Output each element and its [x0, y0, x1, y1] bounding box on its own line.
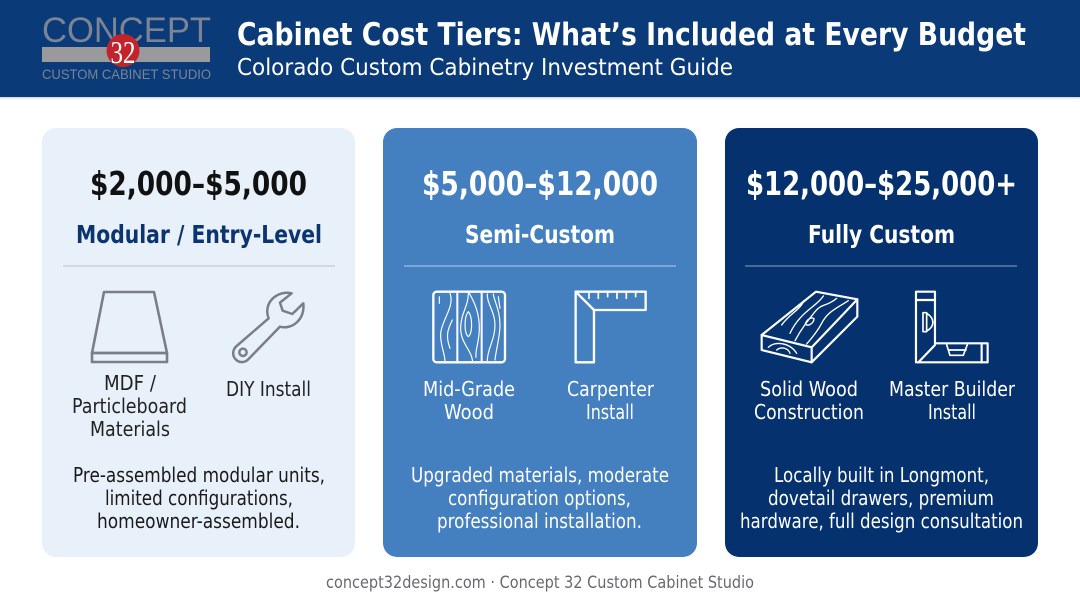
- description: semi-custom: [411, 463, 669, 533]
- label: mid-grade wood: Mid-Grade: [423, 377, 515, 401]
- label: MDF materials: [72, 371, 187, 441]
- description: entry level: Pre-assembled modular units,: [73, 463, 325, 487]
- description: fully custom: Locally built in Longmont,: [774, 463, 989, 487]
- label: mid-grade wood: Wood: [444, 400, 494, 424]
- subtitle: Colorado Custom Cabinetry Investment Guide: [237, 55, 733, 81]
- label: master builder install: [889, 377, 1016, 424]
- icon: carpenter square: [576, 292, 646, 362]
- logo: Concept 32: CUSTOM CABINET STUDIO: [42, 66, 211, 82]
- icon: master builder level: [916, 292, 988, 362]
- label: carpenter install: [567, 377, 655, 424]
- label: master builder install: Master Builder: [889, 377, 1016, 401]
- description: semi-custom: professional installation.: [437, 509, 642, 533]
- icon: solid wood plank: [762, 292, 857, 362]
- icon: wood grain panel: [433, 292, 505, 362]
- label: solid wood construction: Construction: [754, 400, 864, 424]
- description: entry level: [73, 463, 325, 533]
- label: carpenter install: Carpenter: [567, 377, 655, 401]
- tier name: fully custom: Fully Custom: [808, 220, 955, 249]
- icon: MDF board: [92, 292, 167, 362]
- panel: fully custom: [725, 128, 1038, 557]
- description: semi-custom: configuration options,: [448, 486, 631, 510]
- label: DIY install: DIY Install: [226, 377, 311, 401]
- logo: Concept 32: CONCEPT: [42, 11, 211, 50]
- description: fully custom: dovetail drawers, premium: [768, 486, 994, 510]
- label: MDF materials: MDF /: [104, 371, 156, 395]
- tier name: modular: Modular / Entry-Level: [76, 220, 322, 249]
- label: master builder install: Install: [928, 400, 976, 424]
- label: carpenter install: Install: [586, 400, 634, 424]
- label: solid wood construction: [754, 377, 864, 424]
- description: fully custom: hardware, full design consultation: [740, 509, 1023, 533]
- header band: [0, 0, 1080, 98]
- description: semi-custom: Upgraded materials, moderate: [411, 463, 669, 487]
- panel: modular entry-level: [42, 128, 355, 557]
- footer: concept32design.com · Concept 32 Custom Cabinet Studio: [326, 573, 754, 593]
- description: entry level: homeowner-assembled.: [97, 509, 300, 533]
- logo: Concept 32: [42, 11, 211, 82]
- tier name: semi-custom: Semi-Custom: [465, 220, 615, 249]
- price: semi-custom: $5,000–$12,000: [422, 164, 658, 203]
- price: entry level: $2,000–$5,000: [90, 164, 307, 203]
- panel: semi-custom: [383, 128, 697, 557]
- icon: wrench: [233, 293, 303, 362]
- label: solid wood construction: Solid Wood: [760, 377, 858, 401]
- logo: Concept 32: 32: [110, 34, 136, 70]
- description: entry level: limited configurations,: [105, 486, 293, 510]
- label: mid-grade wood: [423, 377, 515, 424]
- label: MDF materials: Particleboard: [72, 394, 187, 418]
- label: MDF materials: Materials: [90, 417, 170, 441]
- description: fully custom: [740, 463, 1023, 533]
